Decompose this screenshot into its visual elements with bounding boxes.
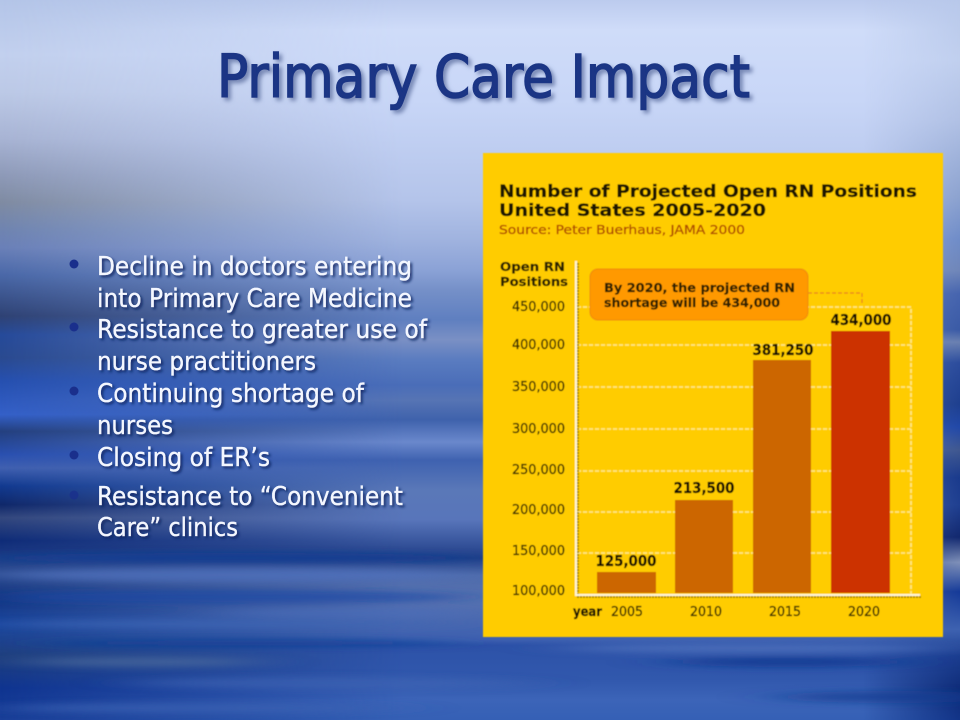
bullet list (70, 252, 428, 543)
y-axis title: Positions (500, 275, 568, 289)
y-axis labels: 200,000 (512, 503, 565, 518)
bar value labels: 213,500 (674, 479, 734, 497)
panel: RN positions chart (483, 153, 943, 637)
bullet text: Closing of ER’s (97, 443, 270, 473)
x-axis labels: year (573, 605, 603, 620)
y-axis labels: 100,000 (512, 584, 565, 599)
y-axis title (500, 260, 568, 289)
bar value labels (596, 311, 892, 570)
chart heading: Number of Projected Open RN Positions (499, 182, 917, 201)
title: Primary Care Impact (217, 42, 750, 111)
x-axis labels: 2020 (848, 605, 880, 620)
bar value labels: 434,000 (830, 311, 892, 329)
y-axis labels: 400,000 (512, 338, 565, 353)
x-axis labels: 2015 (769, 605, 801, 620)
y-axis title: Open RN (500, 260, 565, 274)
chart heading: United States 2005-2020 (499, 201, 766, 220)
bullet text: nurse practitioners (97, 347, 316, 377)
bar value labels: 381,250 (752, 341, 814, 359)
y-axis labels: 300,000 (512, 422, 565, 437)
gridlines (577, 307, 911, 595)
bullet text: Resistance to greater use of (97, 315, 428, 345)
y-axis labels: 150,000 (512, 544, 565, 559)
chart heading: Source: Peter Buerhaus, JAMA 2000 (499, 222, 745, 237)
x-axis labels (573, 605, 880, 620)
callout (590, 269, 862, 320)
y-axis labels: 350,000 (512, 380, 565, 395)
callout: By 2020, the projected RN (604, 280, 795, 295)
bullet text (97, 252, 428, 543)
y-axis labels (512, 300, 565, 599)
y-axis labels: 450,000 (512, 300, 565, 315)
x-axis labels: 2005 (611, 605, 643, 620)
bullet text: into Primary Care Medicine (97, 284, 412, 314)
bullet text: Decline in doctors entering (97, 252, 412, 282)
bullet text: Resistance to “Convenient (97, 482, 403, 512)
bullet text: Care” clinics (97, 513, 238, 543)
chart heading (499, 182, 917, 237)
bullet markers (70, 260, 78, 500)
bars (597, 331, 890, 593)
x-axis labels: 2010 (690, 605, 722, 620)
bullet text: Continuing shortage of (97, 379, 365, 409)
bullet text: nurses (97, 411, 173, 441)
bar value labels: 125,000 (596, 552, 656, 570)
callout: shortage will be 434,000 (604, 295, 780, 310)
axes (576, 261, 922, 597)
y-axis labels: 250,000 (512, 463, 565, 478)
